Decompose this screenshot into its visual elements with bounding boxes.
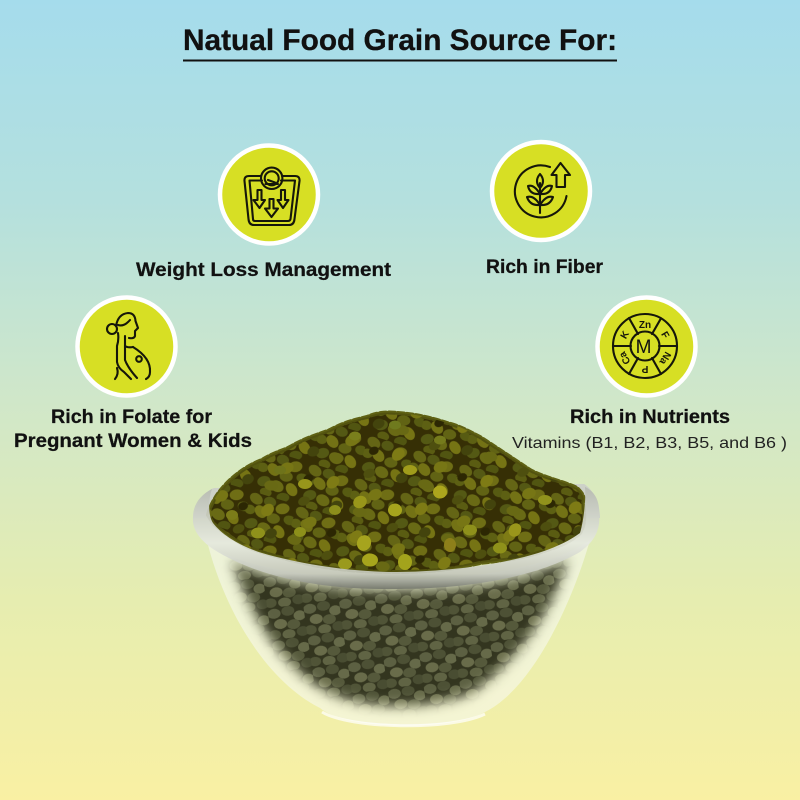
icon: mineral wheel: Na bbox=[656, 349, 673, 366]
icon: wheat with up arrow bbox=[492, 142, 590, 240]
bowl of mung beans bbox=[190, 412, 610, 740]
title: Natual Food Grain Source For: bbox=[183, 24, 617, 57]
benefit: rich in fiber bbox=[486, 142, 604, 278]
icon: mineral wheel: Zn bbox=[639, 320, 651, 331]
icon: weighing scale with down arrows bbox=[220, 146, 318, 244]
label: rich in fiber: Rich in Fiber bbox=[486, 257, 604, 278]
back rim of bowl bbox=[193, 484, 600, 518]
glass bowl body bbox=[208, 545, 588, 728]
label: vitamins list: Vitamins (B1, B2, B3, B5, and B6 ) bbox=[512, 435, 787, 452]
benefit: rich in nutrients bbox=[512, 298, 787, 452]
label: rich in nutrients: Rich in Nutrients bbox=[570, 407, 730, 428]
benefit: weight loss management bbox=[136, 146, 392, 281]
label: rich in folate: Rich in Folate for bbox=[51, 407, 213, 428]
icon: mineral wheel: M bbox=[636, 337, 651, 358]
benefit: folate for pregnant women and kids bbox=[14, 298, 252, 452]
label: weight loss management: Weight Loss Management bbox=[136, 260, 392, 281]
icon: pregnant woman bbox=[78, 298, 176, 396]
icon: mineral wheel: F bbox=[658, 330, 671, 341]
bean mound bbox=[208, 412, 584, 572]
icon: mineral wheel: P bbox=[641, 363, 648, 374]
icon: mineral wheel bbox=[598, 298, 696, 396]
label: pregnant women and kids: Pregnant Women & Kids bbox=[14, 431, 252, 452]
icon: mineral wheel: Ca bbox=[617, 349, 633, 366]
icon: mineral wheel: K bbox=[619, 329, 632, 341]
front glass rim bbox=[193, 487, 599, 589]
